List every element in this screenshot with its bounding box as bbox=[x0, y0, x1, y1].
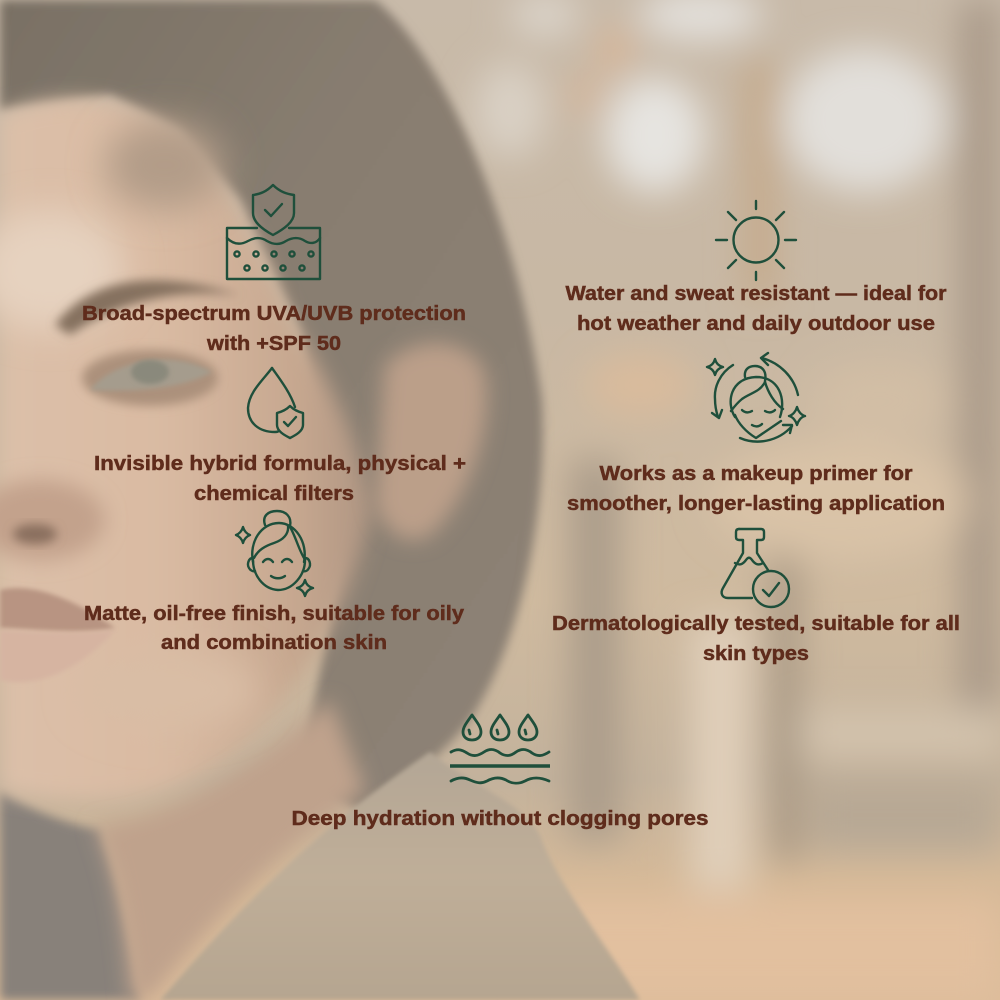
text: water resistant bbox=[566, 282, 947, 335]
icon: sun bbox=[716, 201, 796, 280]
text: dermatologically tested bbox=[552, 612, 960, 665]
icon: water drops and waves bbox=[450, 715, 550, 783]
text: protection: Broad-spectrum UVA/UVB protection bbox=[82, 302, 466, 325]
text: matte: Matte, oil-free finish, suitable for oily bbox=[84, 602, 465, 625]
face and neck bbox=[0, 99, 372, 800]
text: protection: with +SPF 50 bbox=[206, 332, 341, 355]
hair bbox=[0, 0, 543, 810]
coat bbox=[160, 752, 640, 1000]
icon: smiling face with sparkles bbox=[236, 511, 313, 596]
icon: drop with shield bbox=[248, 368, 303, 438]
text: water resistant: hot weather and daily outdoor use bbox=[577, 312, 935, 335]
text: dermatologically tested: skin types bbox=[703, 642, 809, 665]
text: hydration: Deep hydration without clogging pores bbox=[292, 807, 708, 830]
text: makeup primer: smoother, longer-lasting application bbox=[567, 492, 945, 515]
text: protection bbox=[82, 302, 466, 355]
icon: shield over skin layers bbox=[227, 185, 320, 279]
text: water resistant: Water and sweat resistant — ideal for bbox=[566, 282, 947, 305]
ear bbox=[375, 343, 487, 540]
icon: flask with check bbox=[722, 529, 789, 607]
text: makeup primer: Works as a makeup primer for bbox=[600, 462, 913, 485]
text: makeup primer bbox=[567, 462, 945, 515]
text: formula: Invisible hybrid formula, physical + bbox=[94, 452, 466, 475]
text: dermatologically tested: Dermatologically tested, suitable for all bbox=[552, 612, 960, 635]
icon: face with cycle arrows bbox=[707, 353, 805, 442]
text: formula bbox=[94, 452, 466, 505]
text: matte bbox=[84, 602, 465, 654]
text: formula: chemical filters bbox=[194, 482, 354, 505]
text: matte: and combination skin bbox=[161, 631, 387, 654]
facial features bbox=[0, 120, 260, 730]
